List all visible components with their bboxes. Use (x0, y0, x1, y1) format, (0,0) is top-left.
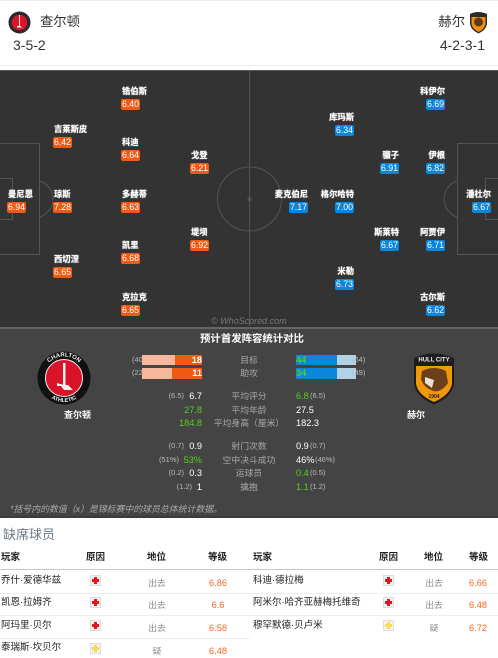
absent: 科迪·德拉梅: 出去 (425, 578, 443, 588)
stat: dribbles: (0.5) (310, 468, 325, 477)
player: 格尔哈特: 7.00 (336, 202, 353, 212)
absent: 乔什·爱德华兹: 6.86 (209, 578, 227, 588)
stat: dribbles (169, 468, 325, 478)
player: 麦克伯尼: 7.17 (290, 202, 307, 212)
stat: average height: 184.8 (179, 418, 202, 428)
absent: 凯恩·拉姆齐: 6.6 (212, 600, 224, 610)
player: 库玛斯 (328, 112, 354, 136)
player: 堤坝: 堤坝 (191, 227, 208, 237)
absent: 阿玛里·贝尔: 出去 (148, 623, 166, 633)
absent: 凯恩·拉姆齐: 出去 (148, 600, 166, 610)
left table header: 玩家 (1, 552, 20, 563)
panel: missing players (0, 516, 498, 658)
player: 西切涅 (53, 254, 80, 278)
player: 斯莱特 (374, 227, 400, 251)
Hull crest: HULL CITY (418, 358, 450, 364)
home goals average: (40) (132, 355, 145, 364)
away goals average: (64) (352, 355, 365, 364)
absent: 泰瑞斯·坎贝尔: 泰瑞斯·坎贝尔 (1, 642, 61, 653)
stat: average age (184, 405, 314, 415)
stat: dribbles: 0.4 (296, 468, 309, 478)
player: 古尔斯 (420, 292, 446, 316)
stat: aerial duels: (51%) (159, 455, 179, 464)
player: 锆伯斯 (121, 86, 148, 110)
pitch markings (0, 71, 498, 326)
player: 斯莱特: 6.67 (381, 240, 398, 250)
player: 科伊尔 (420, 86, 446, 110)
stat: tackles (177, 482, 325, 492)
right table header: 地位 (424, 552, 443, 563)
icon: Charlton crest small (8, 12, 30, 34)
home assists value: 11 (192, 368, 202, 378)
stat: average age: 27.8 (184, 405, 202, 415)
stat: average rating: (6.5) (169, 391, 184, 400)
stat: average age: 平均年龄 (231, 405, 267, 415)
player: 多赫蒂: 多赫蒂 (122, 189, 147, 199)
player: 骝子 (380, 150, 400, 174)
Charlton crest: ATHLETIC (51, 396, 76, 402)
absent: 阿米尔·哈齐亚赫梅托维奇: 出去 (425, 600, 443, 610)
absent: 穆罕默德·贝卢米: 疑 (430, 623, 438, 633)
absent: 阿玛里·贝尔: 阿玛里·贝尔 (1, 620, 52, 631)
player: 西切涅: 西切涅 (54, 254, 79, 264)
player: 科迪 (121, 137, 140, 161)
goals label: 目标 (240, 355, 258, 365)
stat: aerial duels (159, 455, 335, 465)
left table header (1, 551, 227, 563)
absent: 乔什·爱德华兹: 乔什·爱德华兹 (1, 575, 61, 586)
absent: 泰瑞斯·坎贝尔: 疑 (153, 646, 161, 656)
player: 琼斯: 7.28 (54, 202, 71, 212)
player: 曼尼恩: 曼尼恩 (8, 189, 33, 199)
player: 曼尼恩 (7, 189, 33, 213)
pitch panel (0, 70, 498, 329)
stat: dribbles: 运球员 (236, 468, 262, 478)
player: 堤坝 (190, 227, 209, 251)
stat: average rating: 6.7 (189, 391, 202, 401)
player: 古尔斯: 古尔斯 (420, 292, 445, 302)
player: 锆伯斯: 锆伯斯 (122, 86, 147, 96)
player: 琼斯 (53, 189, 72, 213)
absent: 穆罕默德·贝卢米: 穆罕默德·贝卢米 (253, 620, 323, 631)
stat: dribbles: (0.2) (169, 468, 184, 477)
stat: average age: 27.5 (296, 405, 314, 415)
player: 科伊尔: 科伊尔 (420, 86, 445, 96)
absent: 阿米尔·哈齐亚赫梅托维奇: 6.48 (469, 600, 487, 610)
away assists value: 34 (296, 368, 306, 378)
right table header: 玩家 (253, 552, 272, 563)
footnote: *括号内的数值（x）是锦标赛中的球员总体统计数据。 (10, 504, 222, 514)
player: 库玛斯: 库玛斯 (329, 112, 354, 122)
home formation: 3-5-2 (13, 37, 46, 53)
stat: average height: 平均身高（厘米） (214, 418, 284, 428)
player: 伊根 (426, 150, 446, 174)
player: 米勒: 6.73 (336, 279, 353, 289)
player: 克拉克 (121, 292, 148, 316)
player: 阿贾伊: 阿贾伊 (420, 227, 445, 237)
player: 伊根: 6.82 (427, 163, 444, 173)
player: 吉莱斯皮 (53, 124, 88, 148)
player: 克拉克: 克拉克 (122, 292, 147, 302)
player: 曼尼恩: 6.94 (8, 202, 25, 212)
absent: 凯恩·拉姆齐: 凯恩·拉姆齐 (1, 597, 52, 608)
away assists average: (49) (352, 368, 365, 377)
player: 科迪: 6.64 (122, 150, 139, 160)
absent: 科迪·德拉梅: 6.66 (469, 578, 487, 588)
player: 凯里: 6.68 (122, 253, 139, 263)
away goals bar (296, 355, 356, 365)
stat: tackles: 1.1 (296, 482, 309, 492)
player: 琼斯: 琼斯 (54, 189, 71, 199)
icon: Hull crest small (470, 12, 487, 34)
player: 潘杜尔: 6.67 (473, 202, 490, 212)
player: 米勒 (335, 266, 354, 290)
stat: shots: (0.7) (310, 441, 325, 450)
player: 堤坝: 6.92 (191, 240, 208, 250)
player: 潘杜尔: 潘杜尔 (466, 189, 491, 199)
player: 克拉克: 6.65 (122, 305, 139, 315)
player: 阿贾伊: 6.71 (427, 240, 444, 250)
absent: 乔什·爱德华兹: 出去 (148, 578, 166, 588)
player: 麦克伯尼: 麦克伯尼 (275, 189, 308, 199)
absent: 阿玛里·贝尔 (0, 619, 250, 635)
player: 伊根: 伊根 (428, 150, 445, 160)
player: 吉莱斯皮: 吉莱斯皮 (54, 124, 87, 134)
right table header: 原因 (379, 552, 398, 563)
player: 戈登 (190, 150, 209, 174)
absent: 科迪·德拉梅: 科迪·德拉梅 (253, 575, 304, 586)
away team name: 赫尔 (438, 14, 465, 29)
player: 格尔哈特 (320, 189, 354, 213)
absent: 穆罕默德·贝卢米: 6.72 (469, 623, 487, 633)
Hull crest: 1904 (428, 394, 440, 400)
player: 古尔斯: 6.62 (427, 305, 444, 315)
home goals value: 18 (192, 355, 202, 365)
player: 戈登: 戈登 (191, 150, 208, 160)
player: 吉莱斯皮: 6.42 (54, 137, 71, 147)
home team label: 查尔顿 (64, 410, 91, 420)
watermark: © WhoScored.com (211, 316, 287, 326)
right table header: 等级 (469, 552, 488, 563)
left table header: 等级 (208, 552, 227, 563)
absent: 阿米尔·哈齐亚赫梅托维奇: 阿米尔·哈齐亚赫梅托维奇 (253, 597, 361, 608)
player: 西切涅: 6.65 (54, 267, 71, 277)
absent: 乔什·爱德华兹 (1, 574, 227, 588)
stat: average rating: 6.8 (296, 391, 309, 401)
stat: aerial duels: 46% (296, 455, 314, 465)
stat: average rating (169, 391, 325, 401)
player: 骝子: 骝子 (382, 150, 399, 160)
player: 潘杜尔 (466, 189, 492, 213)
Charlton crest: CHARLTON (47, 352, 82, 362)
stat: shots: 0.9 (296, 441, 309, 451)
away assists bar (296, 368, 356, 379)
stat: tackles: 擒抱 (240, 482, 258, 492)
absent: 泰瑞斯·坎贝尔: 6.48 (209, 646, 227, 656)
player: 骝子: 6.91 (381, 163, 398, 173)
absent: 泰瑞斯·坎贝尔 (0, 641, 250, 657)
stat: tackles: (1.2) (177, 482, 192, 491)
player: 科迪: 科迪 (122, 137, 139, 147)
Charlton crest (38, 352, 90, 404)
missing players heading: 缺席球员 (3, 527, 55, 542)
left table header: 原因 (86, 552, 105, 563)
home assists bar (142, 368, 202, 379)
absent: 科迪·德拉梅 (250, 574, 498, 590)
assists label: 助攻 (240, 368, 258, 378)
away goals value: 44 (296, 355, 306, 365)
stat: aerial duels: (46%) (315, 455, 335, 464)
stat: average rating: 平均评分 (231, 391, 267, 401)
stat: shots: 射门次数 (231, 441, 267, 451)
stats panel (0, 329, 498, 516)
stat: dribbles: 0.3 (189, 468, 202, 478)
stat: average height (179, 418, 319, 428)
stats title: 预计首发阵容统计对比 (200, 334, 304, 345)
match header (0, 0, 498, 66)
stat: average height: 182.3 (296, 418, 319, 428)
absent: 穆罕默德·贝卢米 (250, 619, 498, 635)
absent: 阿玛里·贝尔: 6.58 (209, 623, 227, 633)
player: 凯里: 凯里 (122, 240, 139, 250)
absent: 阿米尔·哈齐亚赫梅托维奇 (250, 596, 498, 612)
stat: tackles: 1 (197, 482, 202, 492)
player: 戈登: 6.21 (191, 163, 208, 173)
stat: average rating: (6.5) (310, 391, 325, 400)
assists row (132, 368, 365, 379)
player: 多赫蒂 (121, 189, 147, 213)
home team name: 查尔顿 (40, 14, 80, 29)
player: 库玛斯: 6.34 (336, 125, 353, 135)
absent: 凯恩·拉姆齐 (1, 596, 224, 610)
player: 阿贾伊 (420, 227, 446, 251)
player: 麦克伯尼 (274, 189, 308, 213)
player: 科伊尔: 6.69 (427, 99, 444, 109)
player: 多赫蒂: 6.63 (122, 202, 139, 212)
stat: shots: (0.7) (169, 441, 184, 450)
player: 斯莱特: 斯莱特 (374, 227, 399, 237)
player: 米勒: 米勒 (337, 266, 354, 276)
home goals bar (142, 355, 202, 365)
player: 凯里 (121, 240, 140, 264)
player: 格尔哈特: 格尔哈特 (321, 189, 354, 199)
goals row (132, 355, 365, 365)
stat: aerial duels: 空中决斗成功 (223, 455, 275, 465)
home assists average: (22) (132, 368, 145, 377)
Hull crest (414, 354, 454, 404)
away formation: 4-2-3-1 (440, 37, 485, 53)
stat: shots: 0.9 (189, 441, 202, 451)
stat: aerial duels: 53% (184, 455, 202, 465)
right table header (253, 551, 488, 563)
player: 锆伯斯: 6.40 (122, 99, 139, 109)
stat: shots (169, 441, 325, 451)
left table header: 地位 (147, 552, 166, 563)
away team label: 赫尔 (407, 410, 425, 420)
stat: tackles: (1.2) (310, 482, 325, 491)
